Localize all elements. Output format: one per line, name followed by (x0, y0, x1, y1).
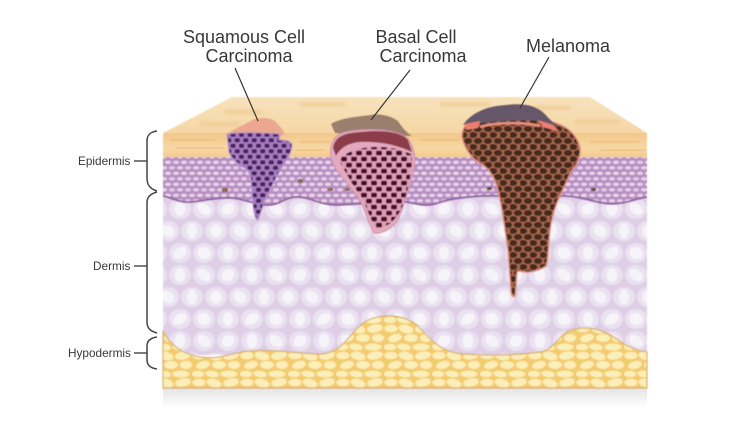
label: dermis (93, 259, 147, 273)
heading: basal cell carcinoma: Basal Cell (375, 27, 457, 47)
heading: squamous cell carcinoma (183, 27, 305, 66)
moles (222, 179, 596, 192)
stratum corneum front (163, 133, 647, 159)
heading: basal cell carcinoma: Carcinoma (379, 46, 468, 66)
squamous cell tumour (227, 118, 292, 220)
epidermis layer (163, 157, 647, 205)
heading: squamous cell carcinoma: Squamous Cell (183, 27, 305, 47)
label: hypodermis: Hypodermis (68, 346, 131, 360)
dermis layer (163, 190, 647, 355)
pointer lines (235, 57, 549, 121)
melanoma tumour (462, 104, 580, 297)
bracket: epidermis (147, 131, 157, 191)
basal cell tumour (331, 114, 415, 233)
basement membrane line (163, 196, 647, 205)
heading: basal cell carcinoma (375, 27, 468, 66)
heading: melanoma: Melanoma (526, 36, 611, 56)
label: dermis: Dermis (93, 259, 130, 273)
shadow under skin block (163, 388, 647, 408)
bracket: dermis (147, 192, 157, 333)
hypodermis fat layer (163, 316, 647, 388)
bracket: hypodermis (147, 337, 157, 369)
skin cross-section (163, 97, 647, 388)
label: epidermis: Epidermis (78, 154, 131, 168)
heading: squamous cell carcinoma: Carcinoma (205, 46, 294, 66)
skin surface top (163, 97, 647, 133)
